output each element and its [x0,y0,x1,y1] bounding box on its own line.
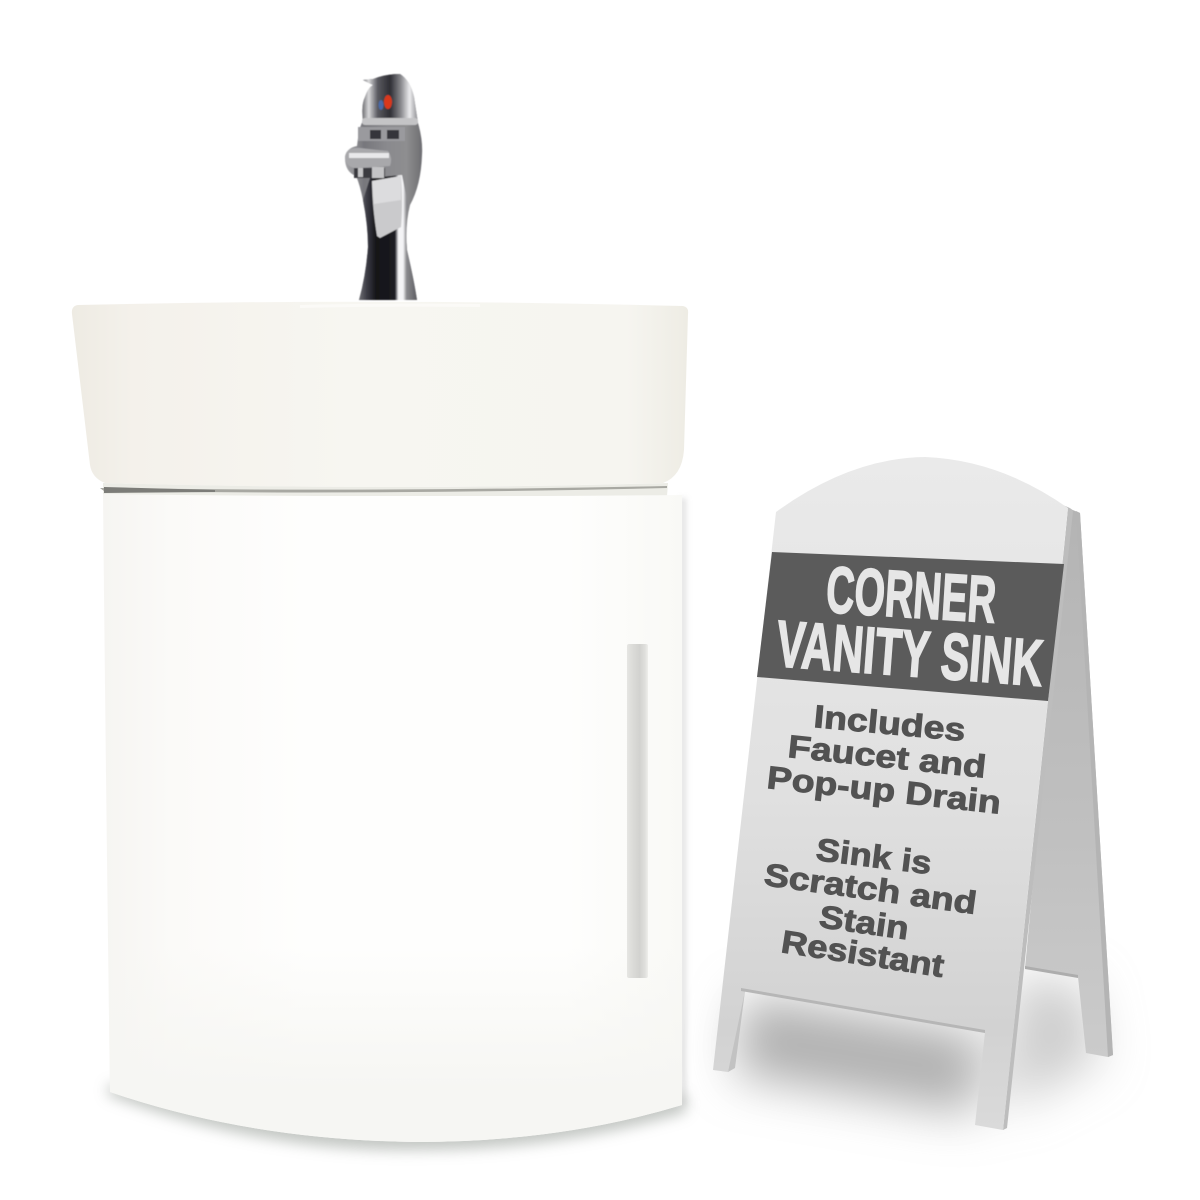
cabinet soft shadow [108,498,686,1150]
faucet reflection panel [372,176,402,238]
faucet dome [362,74,418,123]
cabinet [103,494,682,1142]
sign feature: scratch and stain resistant: Stain [817,898,911,946]
heading: vanity sink: VANITY SINK [774,606,1046,700]
basin rim highlight [300,304,480,308]
sign ground shadow [735,975,1100,1115]
sink basin [72,302,688,487]
sandwich board sign [713,457,1113,1130]
cabinet gap strip [100,483,668,496]
faucet body [345,74,422,300]
basin body [72,302,688,487]
sign feature: scratch and stain resistant: Resistant [779,923,947,984]
sign feature: scratch and stain resistant: Scratch and [762,856,979,921]
faucet red indicator [384,95,392,109]
sign feature: faucet and drain [765,698,1003,821]
faucet lever [345,148,391,168]
cabinet door handle [627,644,648,978]
sign feature: scratch and stain resistant [762,831,979,984]
faucet lower stem [359,175,417,300]
cabinet body [103,494,682,1142]
sign feature: faucet and drain: Includes [812,698,967,748]
faucet collar [362,118,418,125]
sign front panel [713,457,1068,1130]
sign feature: faucet and drain: Faucet and [786,728,988,785]
faucet [345,74,422,300]
sign heading band [757,552,1064,701]
sign thickness edge [1003,505,1073,1130]
heading: corner: CORNER [824,552,998,637]
sign feature: scratch and stain resistant: Sink is [814,831,934,881]
sign feature: faucet and drain: Pop-up Drain [765,759,1003,821]
sign side panel [1025,508,1113,1057]
